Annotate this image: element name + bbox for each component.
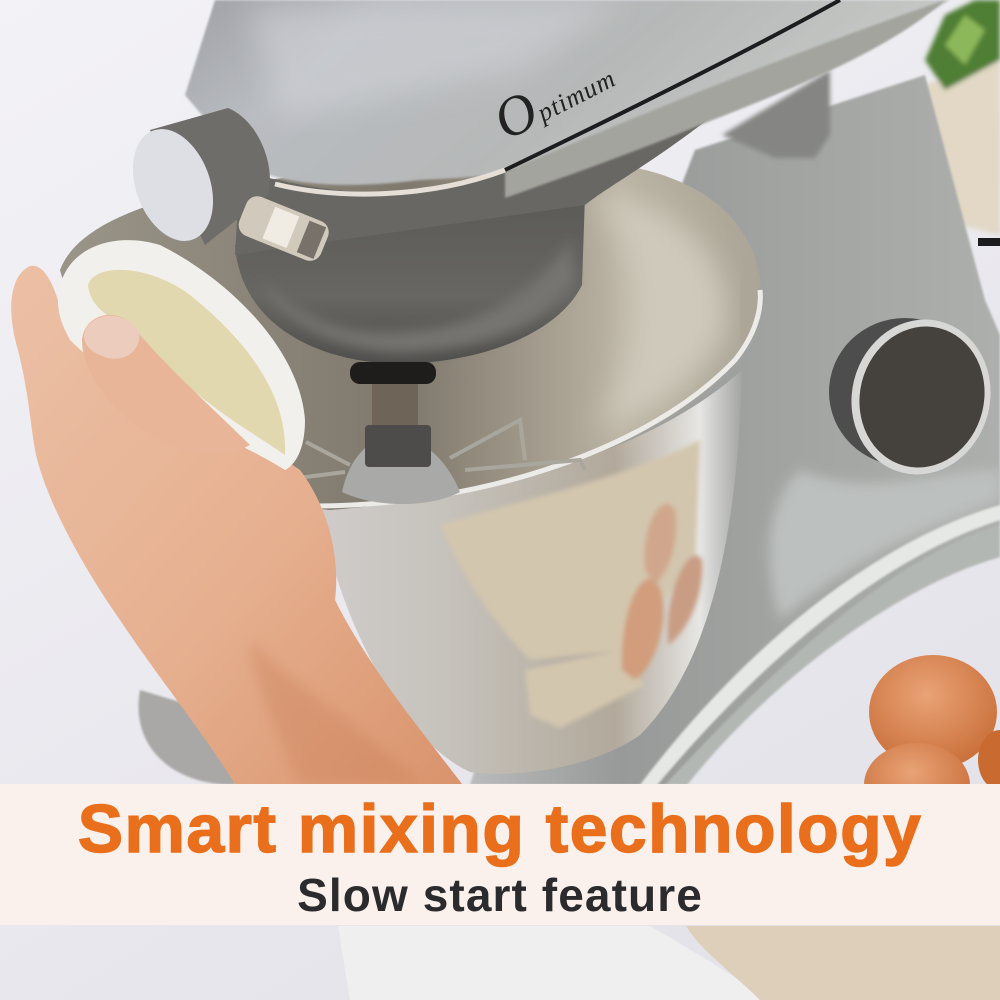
thumbnail (84, 316, 139, 359)
side knob (118, 108, 270, 252)
interior highlight (590, 190, 726, 430)
head underside wedge (235, 110, 720, 255)
beige cloth (686, 926, 1000, 1000)
thumb (82, 315, 250, 454)
bowl rim (318, 290, 760, 506)
banner (0, 784, 1000, 925)
whisk attachment (298, 382, 585, 504)
motor underside (235, 195, 585, 364)
bowl interior (60, 164, 760, 510)
beater shaft collar (350, 362, 436, 384)
cloth reflection in bowl (440, 440, 702, 728)
title: Smart mixing technology (78, 791, 922, 867)
mixer column and base (138, 75, 1000, 785)
white dish with flour (58, 240, 305, 470)
hand (11, 266, 462, 784)
dial on mixer (829, 305, 1000, 489)
logo: Optimum: Optimum (484, 40, 624, 153)
plant pot top right (925, 0, 1000, 235)
cable behind mixer (978, 238, 1000, 246)
lever knob (235, 193, 332, 265)
bowl outer (318, 370, 742, 774)
subtitle: Slow start feature (297, 869, 703, 921)
mixer head (185, 0, 950, 255)
sweater sleeve (338, 926, 762, 1000)
mixer neck (722, 70, 830, 158)
eggs (864, 655, 1000, 827)
motor highlight (260, 240, 575, 352)
